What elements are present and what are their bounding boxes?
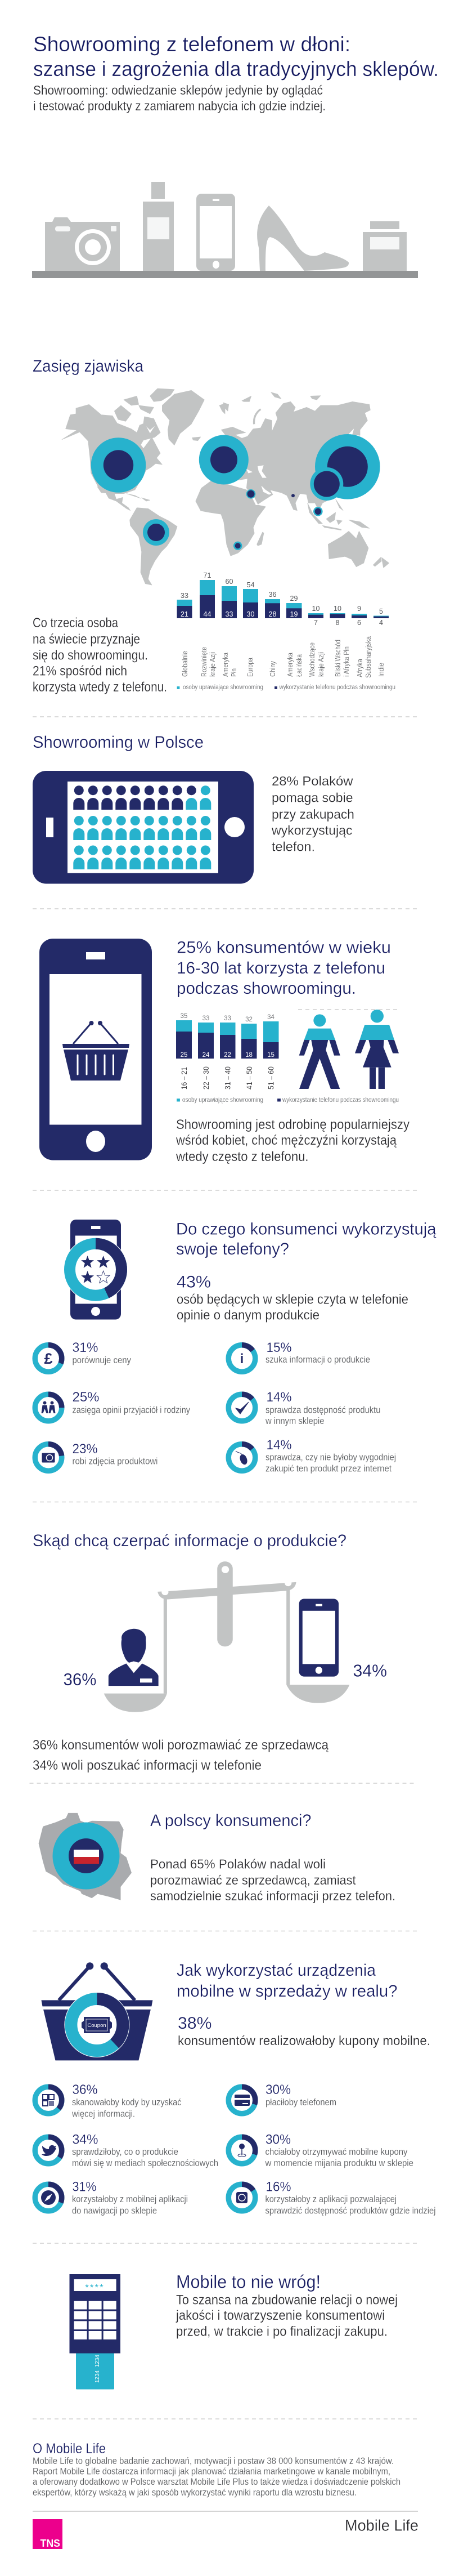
stat: 23 percent take photos: robi zdjęcia produktowi xyxy=(72,1456,158,1466)
stat: 43 percent xyxy=(177,1273,408,1323)
donut: 36 percent with QR icon xyxy=(35,2087,62,2114)
values: 22 xyxy=(224,1052,231,1059)
axis labels: regions: Afryka xyxy=(356,658,364,677)
stat: 36 percent scan codes: 36% xyxy=(72,2082,98,2097)
heading: how to use mobile devices: Jak wykorzystać urządzenia xyxy=(177,1961,376,1980)
values: phone use: 30 xyxy=(247,610,254,618)
icon: bottle xyxy=(143,182,174,271)
stat: 23 percent take photos xyxy=(35,1441,158,1471)
legend xyxy=(177,1097,399,1104)
stat: 14 percent check availability: sprawdza dostępność produktu xyxy=(266,1405,380,1416)
text block: one in three xyxy=(33,615,167,695)
legend xyxy=(177,684,395,691)
subtitle: definition xyxy=(33,83,326,113)
stat: 14 percent check online: zakupić ten produkt przez internet xyxy=(266,1464,392,1474)
stat: 31 percent compare prices xyxy=(35,1340,132,1372)
stat: 36 percent scan codes: więcej informacji. xyxy=(71,2109,135,2119)
axis labels: regions: Indie xyxy=(377,663,385,677)
heading: how to use mobile devices xyxy=(177,1961,397,2001)
text block: opportunity: jakości i towarzyszenie konsumentowi xyxy=(176,2308,385,2323)
text block: about: Raport Mobile Life dostarcza informacji jak planować działania marketingowe w kanale mobilnym, xyxy=(33,2466,390,2476)
axis labels: regions: Subsaharyjska xyxy=(364,636,372,678)
axis labels: regions: Globalnie xyxy=(181,651,189,677)
stat: 16 percent check availability app: korzystałoby z aplikacji pozwalającej xyxy=(266,2194,397,2204)
icon: salesperson xyxy=(109,1629,159,1686)
coupon xyxy=(82,2017,112,2033)
icon: basket xyxy=(62,1021,129,1081)
stat: 34 percent check social media: 34% xyxy=(72,2132,98,2148)
donut: 15 percent with info icon xyxy=(228,1345,255,1372)
text block: 28 percent of Poles: telefon. xyxy=(272,839,315,854)
text block: Polish consumers xyxy=(150,1857,395,1903)
values: phone use: 33 xyxy=(226,610,233,618)
values: showrooming: 9 xyxy=(357,605,361,613)
heading: what consumers use phones for xyxy=(176,1220,436,1258)
figure: woman xyxy=(355,1010,399,1089)
axis labels: age ranges: 16 – 21 xyxy=(180,1067,188,1090)
values: showrooming: 60 xyxy=(226,578,233,586)
heading: Zasięg zjawiska: Zasięg zjawiska xyxy=(33,357,143,376)
donut: 31 percent with pound icon xyxy=(35,1345,62,1372)
stat: 34 percent check social media: sprawdziłoby, co o produkcie xyxy=(72,2147,178,2157)
text block: scale explanation xyxy=(33,1738,329,1773)
terminal screen: **** xyxy=(85,2282,105,2293)
text block: about: a oferowany dodatkowo w Polsce warsztat Mobile Life Plus to także wiedza i doświadczenie polskich xyxy=(33,2476,400,2487)
text block: scale explanation: 36% konsumentów woli porozmawiać ze sprzedawcą xyxy=(33,1738,329,1753)
text block: about xyxy=(33,2456,400,2498)
card: 1234 1234 xyxy=(94,2355,101,2383)
values: 33 xyxy=(224,1015,231,1022)
heading: 25 percent of consumers aged 16-30 xyxy=(177,938,391,998)
axis labels: regions: i Afryka Płn xyxy=(342,646,350,677)
bubble: India xyxy=(291,494,295,497)
legend: osoby uprawiające showrooming xyxy=(183,684,263,691)
heading: 25 percent of consumers aged 16-30: 25% konsumentów w wieku xyxy=(177,938,391,957)
values: phone use: 6 xyxy=(357,619,361,627)
stat: 15 percent seek product info: szuka informacji o produkcie xyxy=(266,1355,370,1365)
stat: 38 percent mobile coupons: konsumentów realizowałoby kupony mobilne. xyxy=(178,2033,430,2048)
icon: camera xyxy=(45,217,120,271)
basket xyxy=(41,1962,152,2060)
logo: TNS xyxy=(33,2519,62,2549)
map: Americas and Greenland xyxy=(62,389,225,585)
axis labels: regions: Bliski Wschód xyxy=(334,640,342,677)
values: phone use: 21 xyxy=(181,610,188,618)
donut: 34 percent with bird icon xyxy=(35,2137,62,2164)
values: showrooming: 33 xyxy=(181,592,188,600)
values: 18 xyxy=(245,1052,253,1059)
donut: 31 percent with compass icon xyxy=(35,2184,62,2211)
text block: about: ekspertów, którzy wskażą w jaki sposób wykorzystać wyniki raportu dla wzrostu biznesu. xyxy=(33,2487,357,2498)
donut: 38 percent xyxy=(71,1999,123,2051)
icon: map of Poland with flag xyxy=(39,1813,132,1900)
heading: how to use mobile devices: mobilne w sprzedaży w realu? xyxy=(177,1982,397,2001)
axis labels: regions: Chiny xyxy=(268,661,277,677)
donut: 15 percent with info icon: i xyxy=(240,1351,244,1367)
legend: wykorzystanie telefonu podczas showroomingu xyxy=(282,1097,399,1104)
bars: phone use share xyxy=(177,595,389,618)
icon: landscape phone with people grid xyxy=(33,771,254,884)
values: 33 xyxy=(202,1015,209,1022)
donut: 23 percent with camera icon xyxy=(35,1444,62,1471)
bubble: Europe xyxy=(199,435,249,484)
bubble: Sub-Saharan Africa xyxy=(233,542,242,550)
donut: 31 percent with pound icon: £ xyxy=(44,1350,53,1367)
axis labels: regions: Wschodzące xyxy=(308,642,316,677)
stat: 30 percent pay by phone xyxy=(228,2082,336,2114)
values: 32 xyxy=(245,1016,253,1023)
illustration: shelf with products xyxy=(32,182,418,278)
stat: 30 percent pay by phone: płaciłoby telefonem xyxy=(266,2097,336,2108)
axis labels: regions xyxy=(181,636,385,678)
stat: 30 percent pay by phone: 30% xyxy=(266,2082,291,2097)
text block: about: Mobile Life to globalne badanie zachowań, motywacji i postaw 38 000 konsumentów z 43 krajów. xyxy=(33,2456,394,2466)
text block: Polish consumers: porozmawiać ze sprzedawcą, zamiast xyxy=(150,1873,356,1887)
values: phone use: 8 xyxy=(336,619,340,627)
axis labels: age ranges: 51 – 60 xyxy=(267,1066,276,1090)
stat: 36 percent scan codes xyxy=(35,2082,181,2119)
stars rating xyxy=(81,1256,110,1283)
heading: O Mobile Life: O Mobile Life xyxy=(33,2441,106,2457)
stat: 25 percent ask friends xyxy=(35,1390,191,1421)
stat: 34 percent check social media xyxy=(35,2132,218,2168)
heading: Showrooming w Polsce: Showrooming w Polsce xyxy=(33,733,204,752)
text block: scale explanation: 34% woli poszukać informacji w telefonie xyxy=(33,1758,262,1773)
axis labels: age ranges xyxy=(180,1066,276,1090)
heading: where they want product info: Skąd chcą czerpać informacje o produkcie? xyxy=(33,1532,346,1550)
stat: 25 percent ask friends: 25% xyxy=(72,1390,99,1405)
heading: 25 percent of consumers aged 16-30: podczas showroomingu. xyxy=(177,979,356,998)
flag xyxy=(74,1850,99,1864)
values: 25 xyxy=(181,1052,187,1059)
values: phone use: 28 xyxy=(269,610,276,618)
shelf xyxy=(32,271,418,278)
axis labels: regions: kraje Azji xyxy=(317,652,325,677)
axis labels: regions: Rozwinięte xyxy=(200,647,208,677)
text block: gender note: wtedy często z telefonu. xyxy=(176,1149,308,1164)
stat: 30 percent want mobile coupons: chciałoby otrzymywać mobilne kupony xyxy=(266,2147,408,2157)
axis labels: regions: Łacińska xyxy=(295,654,303,677)
terminal screen xyxy=(74,2279,116,2293)
icon: phone on scale xyxy=(299,1599,339,1677)
values: phone use: 4 xyxy=(379,619,383,627)
scale: beam, post and pans xyxy=(104,1561,349,1712)
values: showrooming: 54 xyxy=(247,581,254,589)
terminal body xyxy=(70,2274,120,2354)
text block: gender note: Showrooming jest odrobinę popularniejszy xyxy=(176,1117,410,1132)
coupon: Coupon xyxy=(87,2023,106,2029)
bars: phone use share xyxy=(176,1032,279,1059)
bubble: Middle East xyxy=(246,489,255,499)
values: showrooming: 10 xyxy=(312,605,320,613)
stat: 30 percent want mobile coupons: 30% xyxy=(266,2132,291,2148)
values: showrooming: 29 xyxy=(290,595,298,602)
stat: 43 percent: opinie o danym produkcie xyxy=(177,1307,320,1323)
values xyxy=(181,1013,274,1059)
stat: 31 percent use navigation app: do nawigacji po sklepie xyxy=(72,2206,157,2216)
title xyxy=(33,33,439,81)
stat: 31 percent use navigation app: 31% xyxy=(72,2179,97,2195)
text block: opportunity xyxy=(176,2293,398,2339)
stat: 14 percent check online xyxy=(228,1437,396,1474)
card xyxy=(76,2353,114,2390)
heading: A polscy konsumenci: A polscy konsumenci? xyxy=(150,1811,312,1830)
donut: 16 percent with app icon xyxy=(228,2184,255,2211)
values: showrooming: 71 xyxy=(204,572,211,579)
stat: 14 percent check online: 14% xyxy=(267,1437,291,1453)
text block: opportunity: To szansa na zbudowanie relacji o nowej xyxy=(176,2293,398,2307)
stat: 25 percent ask friends: zasięga opinii przyjaciół i rodziny xyxy=(72,1405,191,1416)
value: 34 percent: 34% xyxy=(353,1661,387,1680)
axis labels: regions: Ameryka xyxy=(221,652,230,677)
stat: 23 percent take photos: 23% xyxy=(72,1441,98,1457)
stat: 16 percent check availability app xyxy=(228,2179,435,2216)
stat: 30 percent want mobile coupons xyxy=(228,2132,413,2168)
map: Africa xyxy=(196,480,266,556)
heading: what consumers use phones for: swoje telefony? xyxy=(176,1240,289,1258)
legend: osoby uprawiające showrooming xyxy=(182,1097,263,1104)
subtitle: definition: i testować produkty z zamiarem nabycia ich gdzie indziej. xyxy=(33,99,326,113)
icon: payment terminal with card xyxy=(70,2274,120,2390)
icon: phone with 43 percent donut and stars xyxy=(64,1220,128,1320)
heading: what consumers use phones for: Do czego konsumenci wykorzystują xyxy=(176,1220,436,1239)
stat: 31 percent use navigation app: korzystałoby z mobilnej aplikacji xyxy=(72,2194,188,2204)
bubble: North America xyxy=(91,437,146,493)
bubble: emerging Asia xyxy=(313,507,323,516)
values: 34 xyxy=(267,1014,274,1021)
stat: 31 percent use navigation app xyxy=(35,2179,188,2216)
icon: phone with shopping basket xyxy=(39,939,152,1160)
title: szanse i zagrożenia dla tradycyjnych sklepów. xyxy=(33,57,439,81)
subtitle: definition: Showrooming: odwiedzanie sklepów jedynie by oglądać xyxy=(33,83,323,97)
logo: TNS: TNS xyxy=(40,2537,60,2549)
stat: 36 percent scan codes: skanowałoby kody by uzyskać xyxy=(72,2097,181,2108)
stat: 14 percent check online: sprawdza, czy nie byłoby wygodniej xyxy=(266,1453,396,1463)
values: 24 xyxy=(202,1052,210,1059)
values: showrooming: 36 xyxy=(269,591,276,599)
values: phone use: 44 xyxy=(204,610,211,618)
axis labels: regions: kraje Azji xyxy=(208,652,217,677)
stat: 30 percent want mobile coupons: w momencie mijania produktu w sklepie xyxy=(265,2158,413,2168)
heading: 25 percent of consumers aged 16-30: 16-30 lat korzysta z telefonu xyxy=(177,959,385,977)
stat: 15 percent seek product info: 15% xyxy=(267,1340,291,1355)
bars: showrooming share xyxy=(176,1020,279,1059)
values: phone use xyxy=(181,610,383,627)
icon: high-heel shoe xyxy=(257,206,349,271)
bubble: China xyxy=(310,467,343,501)
terminal keypad xyxy=(74,2301,116,2340)
axis labels: age ranges: 31 – 40 xyxy=(224,1066,232,1090)
text block: one in three: korzysta wtedy z telefonu. xyxy=(33,680,167,695)
values: showrooming: 5 xyxy=(379,608,383,615)
text block: opportunity: przed, w trakcie i po finalizacji zakupu. xyxy=(176,2324,388,2339)
stat: 14 percent check availability: w innym sklepie xyxy=(265,1416,324,1426)
text block: 28 percent of Poles: 28% Polaków xyxy=(272,774,353,788)
bubble: developed Asia xyxy=(315,434,380,499)
text block: one in three: 21% spośród nich xyxy=(33,663,127,679)
text block: one in three: na świecie przyznaje xyxy=(33,632,140,647)
icon: jar xyxy=(363,221,407,271)
text block: Polish consumers: Ponad 65% Polaków nadal woli xyxy=(150,1857,326,1872)
figures: man and woman xyxy=(299,1010,399,1089)
values: showrooming xyxy=(181,572,383,615)
stat: 16 percent check availability app: sprawdzić dostępność produktów gdzie indziej xyxy=(266,2206,435,2216)
stat: 31 percent compare prices: porównuje ceny xyxy=(72,1355,132,1365)
stat: 38 percent mobile coupons xyxy=(178,2014,430,2048)
donut: 14 percent with mouse icon xyxy=(228,1444,255,1471)
values: 35 xyxy=(181,1013,187,1020)
values: phone use: 19 xyxy=(290,610,298,618)
values: 15 xyxy=(267,1052,274,1059)
text block: 28 percent of Poles: wykorzystując xyxy=(271,823,352,838)
stat: 38 percent mobile coupons: 38% xyxy=(178,2014,212,2033)
figure: man xyxy=(299,1014,340,1089)
bar chart: by age xyxy=(176,1013,399,1104)
stat: 14 percent check availability xyxy=(228,1390,380,1426)
bar chart: showrooming by region xyxy=(177,572,395,691)
donut: 25 percent with people icon xyxy=(35,1394,62,1421)
axis labels: regions: Ameryka xyxy=(286,652,294,677)
text block: gender note xyxy=(176,1117,410,1164)
text block: 28 percent of Poles: przy zakupach xyxy=(272,807,354,822)
stat: 43 percent: 43% xyxy=(177,1273,211,1292)
bars: showrooming share xyxy=(177,580,389,618)
map: Eurasia and Oceania xyxy=(210,392,389,568)
icon: phone xyxy=(196,194,235,271)
people: row 3 xyxy=(73,846,211,869)
donut: 14 percent with check icon xyxy=(228,1394,255,1421)
axis labels: age ranges: 22 – 30 xyxy=(202,1066,210,1090)
axis labels: regions: Płn xyxy=(230,668,238,677)
text block: Polish consumers: samodzielnie szukać informacji przez telefon. xyxy=(150,1889,395,1903)
people: row 1 (28 percent navy) xyxy=(73,785,211,810)
axis labels: regions: Europa xyxy=(246,657,254,677)
text block: 28 percent of Poles: pomaga sobie xyxy=(272,791,353,805)
people: row 2 xyxy=(73,816,211,840)
value: 36 percent: 36% xyxy=(63,1669,97,1689)
stat: 16 percent check availability app: 16% xyxy=(266,2179,291,2195)
stat: 34 percent check social media: mówi się w mediach społecznościowych xyxy=(72,2158,218,2168)
stat: 14 percent check availability: 14% xyxy=(267,1390,291,1405)
legend: wykorzystanie telefonu podczas showroomingu xyxy=(279,684,395,691)
title: Showrooming z telefonem w dłoni: xyxy=(33,33,350,56)
text block: gender note: wśród kobiet, choć mężczyźni korzystają xyxy=(176,1133,397,1148)
stat: 15 percent seek product info xyxy=(228,1340,370,1372)
bubble: Latin America xyxy=(143,519,169,546)
text block: one in three: Co trzecia osoba xyxy=(33,615,119,631)
logo: Mobile Life wordmark: Mobile Life xyxy=(345,2517,418,2534)
heading: Mobile to nie wróg: Mobile to nie wróg! xyxy=(176,2271,321,2292)
values: phone use: 7 xyxy=(314,619,318,627)
donut: 30 percent with card icon xyxy=(228,2087,255,2114)
stat: 43 percent: osób będących w sklepie czyta w telefonie xyxy=(177,1292,408,1307)
values: showrooming: 10 xyxy=(334,605,341,613)
icon: basket with coupon donut xyxy=(41,1962,152,2060)
illustration: balance scale xyxy=(104,1561,349,1712)
text block: 28 percent of Poles xyxy=(271,774,354,854)
map: Poland xyxy=(39,1813,132,1900)
axis labels: age ranges: 41 – 50 xyxy=(245,1066,254,1090)
stat: 31 percent compare prices: 31% xyxy=(72,1340,98,1355)
donut: 43 percent xyxy=(70,1244,122,1296)
text block: one in three: się do showroomingu. xyxy=(33,648,148,663)
donut: 30 percent with pin icon xyxy=(228,2137,255,2164)
world map with bubbles xyxy=(62,389,389,585)
